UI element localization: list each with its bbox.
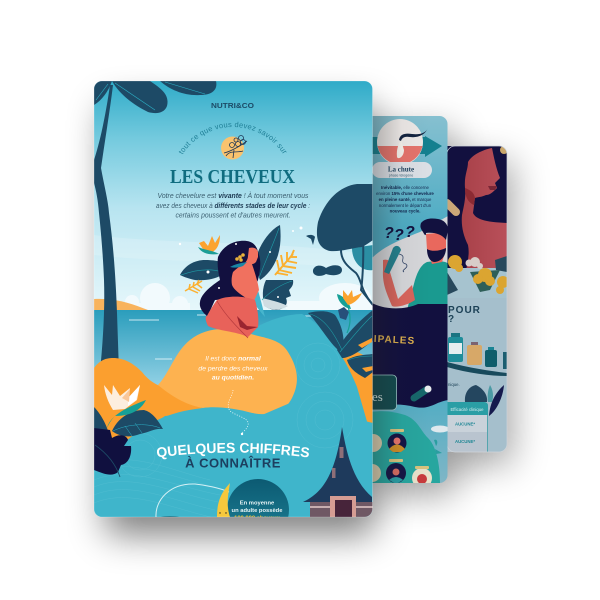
intro text: avez des cheveux à différents stades de leur cycle : [156,201,310,210]
heading: curved: QUELQUES CHIFFRES [156,442,310,460]
hair strands [399,254,407,272]
palm leaf left [94,81,112,105]
icon: hair flower [221,136,247,160]
arrow band [372,136,442,157]
hair flowers [235,253,245,262]
palm leaf veins [96,82,205,110]
question marks: ? [394,227,404,244]
veins [310,314,372,360]
bottom panel with portraits [372,411,448,483]
left orange hill [94,358,215,455]
small cloud blob [313,265,342,276]
teal circle with statistic: En moyenne [240,500,275,506]
bird of paradise and monstera [94,385,163,477]
distant island [94,299,148,310]
middle card: phases and causes [372,116,448,483]
orange fern small [185,280,202,293]
subheading: À CONNAÎTRE [185,456,281,470]
teal circle with statistic [227,479,289,541]
tree on the right [306,184,373,305]
front card edge [94,81,372,517]
sea [94,310,373,400]
teal foreground [94,403,373,518]
phase description: nouveau cycle. [390,208,420,214]
toggle pill [414,386,432,398]
phase label: phase télogène [389,174,413,178]
teal bract [107,400,146,428]
small dark circle [156,516,184,524]
comb [230,262,247,268]
heading fragment: POUR [448,305,481,316]
towel band [262,298,288,309]
clouds [125,283,372,310]
face and torso [232,248,259,305]
house [303,427,373,518]
intro text: Votre chevelure est vivante ! À tout moment vous [158,191,309,200]
leaf veins [181,228,292,300]
question marks: ? [384,225,394,242]
hair [420,218,448,240]
sea glints [129,315,312,359]
gold corner dot [500,146,506,154]
right jungle leaves [308,290,373,378]
phase description: Inévitable, elle concerne [381,185,429,190]
bird of paradise flower [198,235,220,254]
monstera leaf [263,280,293,310]
smiling hair character [217,483,230,517]
small fern [338,307,349,320]
sky [94,81,373,311]
shadow cast by front card [372,116,402,483]
leg shadow [237,316,258,330]
blue leaf [112,410,163,436]
intro text [156,191,310,220]
teal tree blob [352,245,373,270]
petals [104,385,140,410]
palm tree [94,81,216,372]
woman portrait [462,148,507,275]
comparison table: AUCUNE* [455,422,475,426]
table leaves [465,385,504,416]
light bands in the sky [94,236,354,258]
title: LES CHEVEUX [170,166,295,188]
heading fragment [448,306,480,322]
capsule [447,203,456,212]
beard [427,248,446,262]
leaf left [180,260,222,280]
lower leaf [347,354,373,378]
intro text: certains poussent et d'autres meurent. [176,210,291,220]
navy portrait background [448,146,507,268]
sparkles [179,226,302,298]
front card [94,81,372,517]
phase description: en pleine santé, et marque [379,197,432,202]
dark side leaf [94,407,110,445]
logo: NUTRI&CO [211,101,254,110]
orange blob text: au quotidien. [212,374,254,382]
light orange hill [158,329,297,414]
arm [383,260,415,307]
orbit arc [156,484,229,517]
legs [206,297,258,337]
phase description: normalement le départ d'un [379,203,432,208]
head [426,232,446,264]
dotted trail [228,390,248,435]
pale backdrop [372,216,448,310]
orange blob text: Il est donc normal [205,356,261,362]
man with brush [372,216,448,310]
heading fragment: ? [448,314,454,325]
orange fern [275,250,297,275]
neck shadow [465,188,475,205]
phase description: environ 15% d'une chevelure [376,191,434,196]
phase label: La chute [388,166,414,174]
teal hill [94,314,373,520]
label box: es [372,389,383,404]
orange petals [343,290,362,305]
stalk [347,303,350,333]
heading fragment: CIPALES [365,333,415,347]
comparison table [447,402,488,452]
teal bract [337,294,351,309]
splash [306,235,315,245]
veins [113,423,160,436]
canopy [317,184,373,251]
infographic stack [79,79,536,561]
monstera navy [94,428,131,475]
comparison table: AUCUNE* [455,439,475,444]
phase circle [377,119,428,165]
orange gaps [358,338,373,372]
navy wave band [372,303,448,408]
shirt [407,261,448,310]
orange blob text [198,356,268,382]
phase label [372,162,432,178]
brush [384,246,401,274]
phase description [376,185,434,214]
teal circle with statistic: un adulte possède [232,508,283,514]
hair [200,241,260,316]
note fragment: nique. [448,382,460,387]
drop shadows [105,105,513,535]
branches [341,240,373,305]
comparison table: Efficacité clinique [450,407,484,412]
large leaf [337,310,373,358]
curved tagline: tout ce que vous devez savoir sur [178,122,287,154]
lips [488,186,497,190]
right orange hill [310,328,373,470]
orange blob text: de perdre des cheveux [198,366,268,372]
dress [246,276,265,317]
woman and leaves [180,225,297,338]
shelf with bottles [447,333,508,376]
back card: edge [447,146,507,452]
tropical flowers [448,255,507,295]
wave texture [94,343,353,518]
label box [372,374,397,410]
back card: supplements [448,146,507,452]
leaf tall [257,225,281,280]
palm leaf large [112,81,168,113]
palm leaf upper [160,81,216,95]
leaf [308,311,344,353]
teal circle with statistic: 100 000 cheveux [234,516,281,522]
question marks: ? [405,224,415,241]
